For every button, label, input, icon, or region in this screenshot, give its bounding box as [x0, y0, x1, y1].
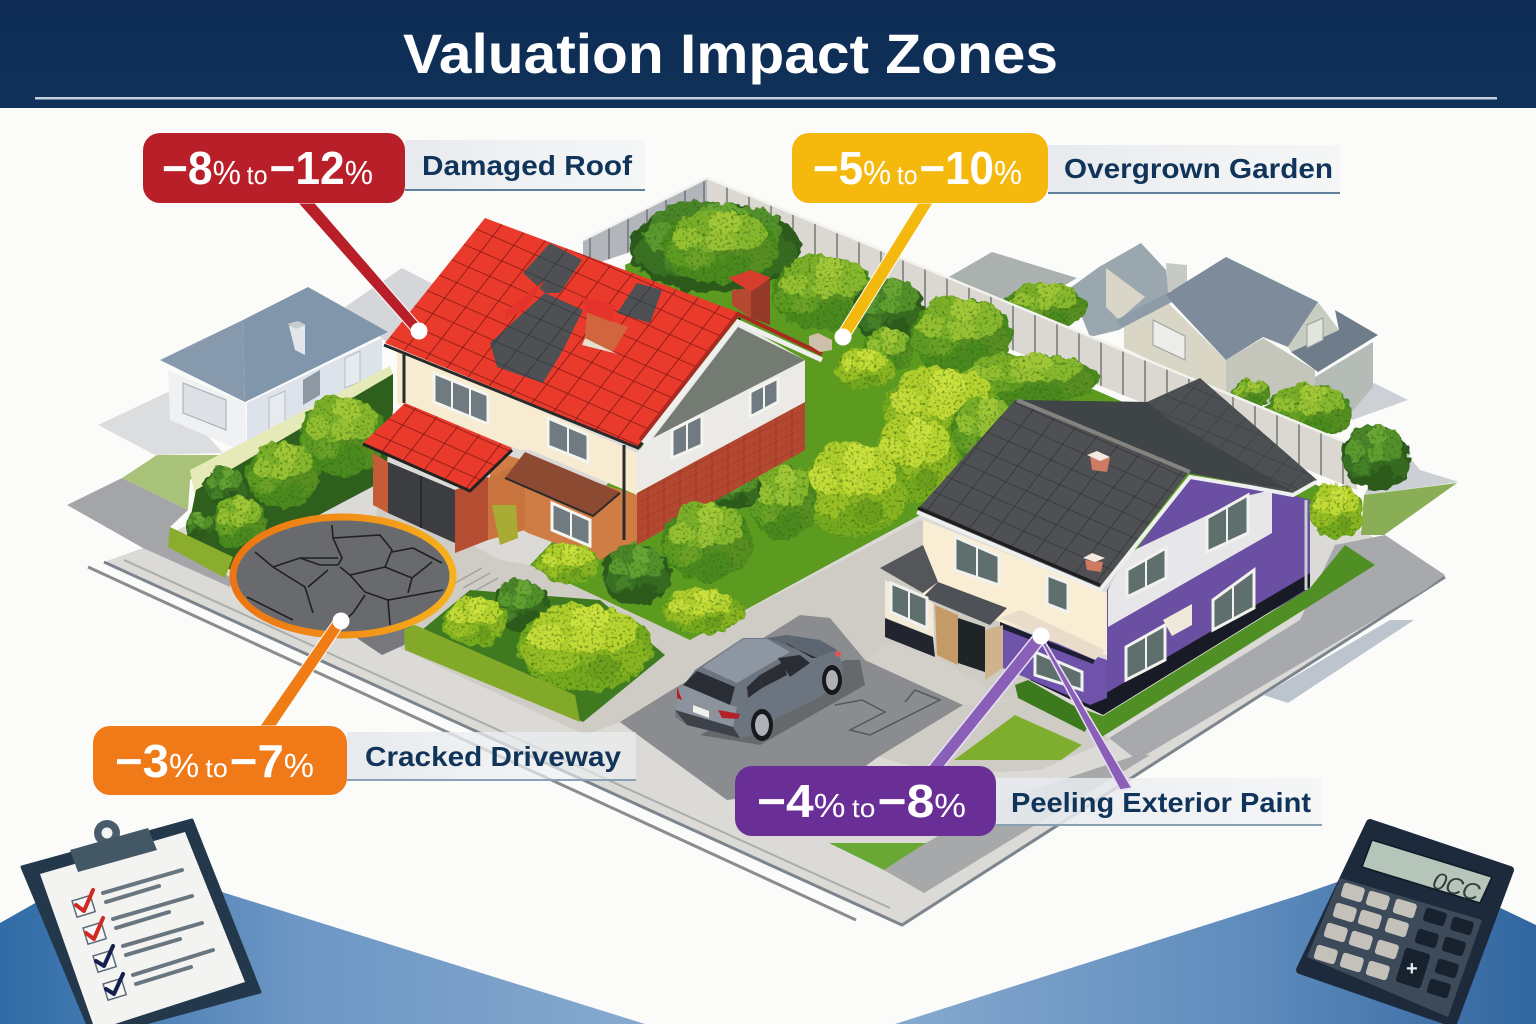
- garage brick: [373, 453, 388, 513]
- porch roof: [505, 452, 620, 515]
- upper windows: [434, 373, 778, 546]
- small front lawn: [954, 715, 1082, 760]
- awning vent: [1163, 604, 1192, 636]
- front hedge of purple house: [1015, 680, 1090, 732]
- main roof: [917, 400, 1188, 588]
- side vent box: [809, 333, 832, 352]
- icon: clipboard checklist: [22, 820, 260, 1024]
- left hedge and shrubs: [168, 366, 393, 578]
- callout: overgrown garden: −5%to−10%: [813, 142, 1022, 194]
- callout: peeling exterior paint: Peeling Exterior Paint: [1011, 787, 1311, 818]
- purple house: [880, 378, 1375, 738]
- right asphalt, lawn and band: [884, 437, 1459, 893]
- brick gable wall lower: [637, 402, 805, 545]
- red-house lawn shrubs: [537, 502, 752, 605]
- peeling section: [1003, 625, 1107, 705]
- roof vents: [1083, 451, 1110, 572]
- red-roof house: [363, 218, 832, 560]
- main damaged roof: [384, 218, 740, 448]
- white upper wall: [637, 322, 805, 493]
- callout: peeling exterior paint: [735, 628, 1322, 836]
- callout: cracked driveway: [93, 612, 636, 795]
- left extension: [885, 580, 935, 657]
- pavement sheet: [88, 300, 1445, 925]
- orange highlight ring: [233, 517, 453, 635]
- entry shrub: [492, 505, 518, 545]
- overgrown garden shrubs: [537, 201, 1099, 634]
- front steps: [455, 568, 498, 593]
- gray gable: [653, 327, 805, 438]
- backdrop house left: [98, 268, 435, 455]
- front hedge and shrubs: [404, 578, 665, 722]
- callout: cracked driveway: −3% to−7%: [115, 735, 314, 787]
- downpipe right: [1304, 500, 1308, 590]
- icon: calculator: +: [1406, 958, 1418, 980]
- garage door: [388, 462, 455, 543]
- blue corner shape right: [895, 860, 1536, 1024]
- cream front wall: [923, 520, 1107, 655]
- chimney: [728, 270, 771, 325]
- callout: damaged roof: Damaged Roof: [422, 150, 633, 181]
- rear roof: [1015, 378, 1317, 493]
- callout: overgrown garden: [792, 133, 1340, 346]
- gable bargeboard: [643, 322, 822, 443]
- callout: cracked driveway: Cracked Driveway: [365, 741, 621, 772]
- garage roof: [363, 403, 512, 490]
- right wall purple: [1107, 477, 1310, 700]
- header band: [0, 0, 1536, 108]
- grey car: [675, 635, 843, 741]
- shrubs behind fence: [1005, 281, 1353, 439]
- callout: overgrown garden: Overgrown Garden: [1064, 153, 1333, 184]
- white band: [1108, 490, 1272, 627]
- icon: calculator: 0CC: [1429, 867, 1484, 907]
- cracked driveway: [231, 516, 455, 655]
- lawn below callout: [829, 843, 926, 870]
- garden lawn: [530, 225, 1340, 640]
- title: Valuation Impact Zones: [403, 22, 1058, 85]
- base black: [1030, 573, 1310, 715]
- asphalt drive: [620, 615, 1012, 800]
- porch: [935, 605, 958, 665]
- gravel yard: [355, 495, 1110, 775]
- callout: damaged roof: −8%to−12%: [162, 142, 373, 194]
- callout: peeling exterior paint: −4% to−8%: [757, 775, 966, 827]
- callout: damaged roof: [143, 133, 645, 340]
- blue corner shape left: [0, 855, 645, 1024]
- lawn: [1018, 545, 1375, 738]
- fence: [583, 178, 1357, 490]
- backdrop houses right: [947, 243, 1408, 420]
- cream front wall: [397, 347, 637, 495]
- right end shrubs: [1341, 424, 1411, 491]
- exposed brick patch: [585, 312, 628, 352]
- lower front wall: [490, 450, 637, 560]
- icon: calculator: [1300, 823, 1510, 1023]
- shrubs by purple house: [1309, 484, 1365, 539]
- house windows: [891, 495, 1254, 690]
- left asphalt and lawn: [67, 455, 232, 587]
- downpipes: [622, 445, 626, 540]
